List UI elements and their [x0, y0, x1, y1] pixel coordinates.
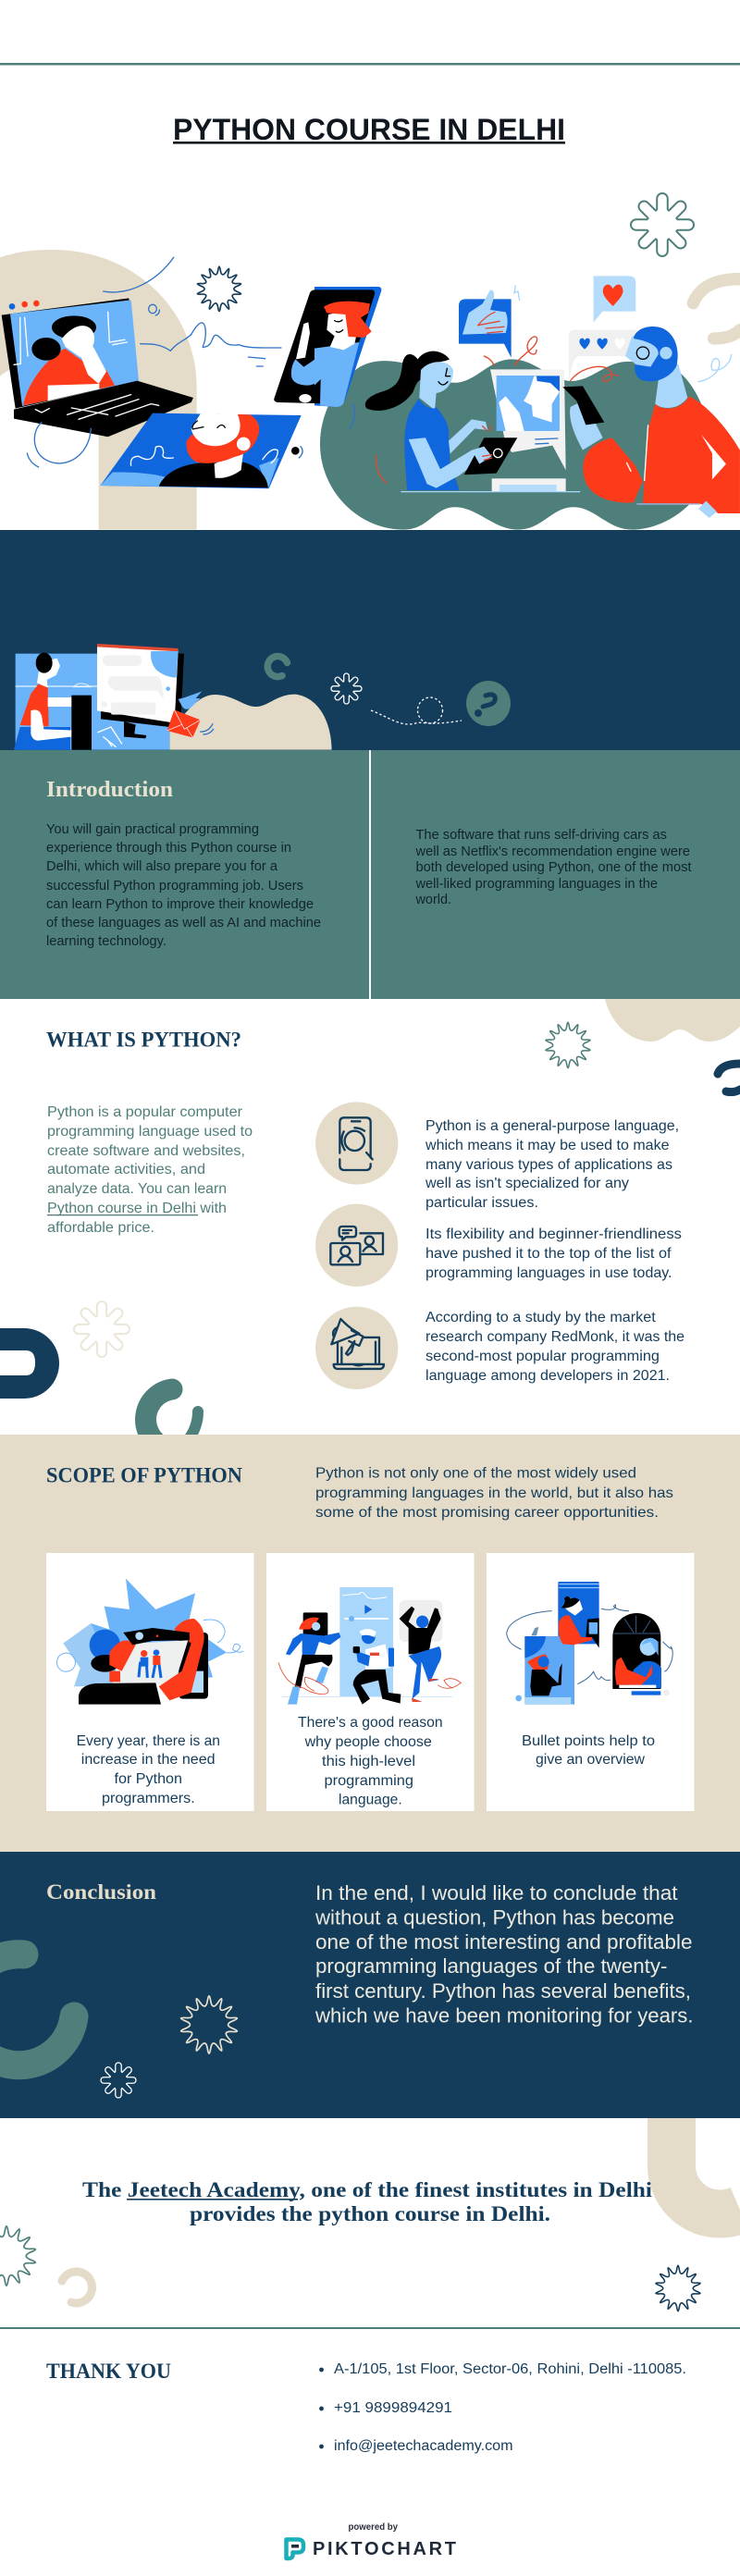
- panel: what is python: [0, 999, 740, 1445]
- text: feature two: programming languages in use today.: [426, 1265, 672, 1281]
- text: feature two: have pushed it to the top of the list of: [426, 1246, 672, 1262]
- illustration: photographer: [56, 1579, 243, 1705]
- icon: teal ring: [267, 657, 287, 677]
- text: introduction left: Delhi, which will also prepare you for a: [46, 858, 278, 874]
- text: conclusion: In the end, I would like to conclude that: [315, 1881, 678, 1904]
- text: introduction left: successful Python programming job. Users: [46, 878, 303, 894]
- section: navy banner: [0, 530, 740, 750]
- woman at laptop: [559, 1596, 599, 1648]
- callout: jeetech academy: The Jeetech Academy, one of the finest institutes in Delhi: [82, 2178, 653, 2201]
- text: feature two: [426, 1226, 682, 1281]
- teal blob: [320, 359, 712, 530]
- callout: jeetech academy: provides the python course in Delhi.: [190, 2202, 550, 2225]
- text: introduction right: well as Netflix's recommendation engine were: [415, 844, 690, 859]
- text: scope intro: [315, 1465, 673, 1521]
- contact list: info@jeetechacademy.com: [334, 2438, 513, 2454]
- text: feature three: language among developers in 2021.: [426, 1368, 670, 1384]
- beige U shape: [672, 2118, 740, 2214]
- icon: white flower: [101, 2063, 136, 2098]
- text: card three: give an overview: [536, 1752, 645, 1768]
- text: card two: [298, 1715, 443, 1807]
- icon: hero teal flower: [631, 193, 694, 256]
- beige ring: [693, 279, 740, 339]
- text: scope intro: programming languages in the world, but it also has: [315, 1485, 673, 1501]
- dotted flight path: [371, 697, 462, 724]
- text: introduction left: experience through this Python course in: [46, 840, 291, 856]
- beige hill: [169, 695, 332, 750]
- heading: scope: SCOPE OF PYTHON: [46, 1463, 242, 1487]
- text: introduction left: can learn Python to improve their knowledge: [46, 896, 314, 912]
- monitor: [490, 369, 566, 491]
- navy starburst: [197, 266, 241, 311]
- icon: question badge: [466, 681, 511, 726]
- light blue panel: [16, 654, 169, 750]
- text: python description: analyze data. You can learn: [47, 1181, 227, 1197]
- text: card one: increase in the need: [81, 1752, 216, 1768]
- contact list: A-1/105, 1st Floor, Sector-06, Rohini, Delhi -110085.: [334, 2361, 686, 2377]
- beige scalloped blob: [605, 999, 740, 1041]
- text: scope intro: Python is not only one of the most widely used: [315, 1465, 636, 1482]
- text: card two: There's a good reason: [298, 1715, 443, 1731]
- icons: feature circles: [315, 1102, 398, 1389]
- text: python description: [47, 1104, 253, 1236]
- man: [14, 653, 92, 750]
- woman with tablet: [365, 351, 487, 490]
- small ring doodle: [149, 304, 159, 315]
- heading: thank you: THANK YOU: [46, 2360, 171, 2383]
- text: card three: Bullet points help to: [522, 1733, 655, 1749]
- text: card two: language.: [339, 1793, 402, 1807]
- navy arc right: [718, 1064, 740, 1092]
- hero illustration: people chatting right: [314, 276, 740, 530]
- illustration: dancers: [278, 1587, 461, 1705]
- text: introduction right: both developed using Python, one of the most: [416, 859, 692, 875]
- laptop: [2, 298, 193, 437]
- text: feature one: [425, 1118, 679, 1211]
- card: good reason: [266, 1553, 474, 1811]
- man with phone: [562, 327, 740, 518]
- text: introduction left: of these languages as well as AI and machine: [46, 915, 321, 931]
- icon: beige ring: [62, 2272, 92, 2303]
- footer: piktochart branding: PIKTOCHART: [313, 2539, 456, 2559]
- speech bubble: thumbs up: [459, 285, 520, 358]
- text: introduction right: [415, 827, 692, 907]
- icon: video chat: [315, 1204, 398, 1287]
- navy D shape: [0, 1328, 59, 1399]
- text: introduction left: [46, 821, 321, 949]
- text: python description: automate activities, and: [47, 1162, 205, 1177]
- text: card two: this high-level: [322, 1754, 415, 1769]
- text: feature one: well as isn't specialized for any: [425, 1176, 629, 1191]
- text: feature one: particular issues.: [426, 1195, 538, 1211]
- icon: teal starburst: [546, 1022, 590, 1068]
- text: conclusion: first century. Python has several benefits,: [315, 1979, 691, 2003]
- pale squiggle: [698, 354, 732, 382]
- curved blue line: [104, 257, 174, 292]
- tablet with smiling woman: [274, 287, 381, 407]
- dancer one: [286, 1618, 340, 1705]
- heading: what is python: WHAT IS PYTHON?: [46, 1029, 241, 1051]
- illustration: neighbours in windows: [507, 1582, 672, 1705]
- contact list: +91 9899894291: [334, 2400, 452, 2416]
- text: card two: programming: [324, 1773, 413, 1789]
- text: conclusion: programming languages of the twenty-: [315, 1954, 667, 1978]
- teal arc: [0, 1954, 74, 2065]
- text: introduction left: learning technology.: [46, 933, 166, 949]
- text: introduction right: world.: [415, 892, 451, 907]
- beige arch: [0, 250, 197, 530]
- heading: conclusion: Conclusion: [46, 1880, 156, 1904]
- footer: piktochart branding: powered by: [348, 2522, 398, 2533]
- arched window: [612, 1613, 661, 1695]
- text: feature one: Python is a general-purpose language,: [426, 1118, 679, 1134]
- text: card one: programmers.: [102, 1791, 195, 1806]
- envelope and bird: [167, 691, 214, 737]
- text: conclusion: [314, 1881, 694, 2028]
- heading: introduction: Introduction: [46, 778, 173, 802]
- panel: conclusion: [0, 1852, 740, 2118]
- card: bullet points: [487, 1553, 694, 1811]
- hero illustration: video call left: [0, 250, 381, 530]
- text: feature three: [426, 1310, 684, 1384]
- speech bubble: blue hearts: [569, 330, 636, 379]
- text: conclusion: one of the most interesting and profitable: [315, 1930, 692, 1954]
- red squiggles: [376, 337, 618, 484]
- illustration: man at computer: [14, 644, 332, 750]
- text: card three: [522, 1733, 655, 1768]
- text: introduction left: You will gain practical programming: [46, 821, 259, 837]
- text: card one: [77, 1733, 220, 1806]
- text: feature one: many various types of applications as: [426, 1157, 672, 1173]
- text: introduction right: well-liked programming languages in the: [415, 876, 658, 892]
- dancer two: [353, 1629, 401, 1705]
- icon: pale flower: [74, 1301, 130, 1357]
- text: python description: affordable price.: [47, 1220, 154, 1236]
- text: conclusion: without a question, Python has become: [314, 1905, 674, 1929]
- text: card two: why people choose: [304, 1734, 432, 1750]
- text: feature two: Its flexibility and beginner-friendliness: [426, 1226, 682, 1242]
- tablet with bearded man: [100, 413, 302, 488]
- icon: beige starburst: [181, 1996, 237, 2053]
- icon: navy starburst right: [656, 2265, 700, 2311]
- blue circle doodle: [27, 423, 91, 467]
- icon: white flower: [331, 673, 362, 704]
- title: PYTHON COURSE IN DELHI: [173, 113, 565, 146]
- text: card one: for Python: [115, 1771, 182, 1787]
- hand tablet: [464, 425, 517, 475]
- panel: introduction: [0, 750, 740, 999]
- text: conclusion: which we have been monitoring for years.: [314, 2003, 694, 2028]
- text: card one: Every year, there is an: [77, 1733, 220, 1749]
- monitor with chat: [97, 644, 184, 738]
- text: feature one: which means it may be used to make: [425, 1138, 670, 1153]
- text: python description: Python is a popular computer: [47, 1104, 243, 1120]
- callout: jeetech academy: [82, 2178, 653, 2225]
- table line: [401, 490, 580, 494]
- text: introduction right: The software that runs self-driving cars as: [416, 827, 667, 843]
- text: feature three: According to a study by the market: [426, 1310, 656, 1325]
- text: python description: programming language used to: [47, 1124, 253, 1140]
- woman waving: [527, 1654, 562, 1695]
- icon: piktochart logo: [287, 2540, 303, 2558]
- icon: phone search: [315, 1102, 398, 1185]
- contact list: [319, 2361, 686, 2454]
- dancer three: [400, 1607, 441, 1702]
- panel: scope of python: [0, 1435, 740, 1852]
- icon: megaphone laptop: [315, 1307, 398, 1389]
- wave line: [141, 323, 281, 366]
- text: feature three: second-most popular programming: [426, 1349, 660, 1364]
- teal C shape: [146, 1389, 198, 1445]
- text: scope intro: some of the most promising career opportunities.: [315, 1505, 659, 1521]
- text: python description: Python course in Delhi with: [47, 1201, 227, 1216]
- tablet overlap: [314, 287, 381, 407]
- footer: piktochart branding: [287, 2522, 456, 2559]
- card: growing need: [46, 1553, 253, 1811]
- text: python description: create software and websites,: [47, 1143, 245, 1159]
- window dots: [9, 301, 40, 310]
- icon: teal starburst left: [0, 2226, 35, 2286]
- text: feature three: research company RedMonk, it was the: [426, 1329, 684, 1345]
- speech bubble: heart: [594, 276, 635, 322]
